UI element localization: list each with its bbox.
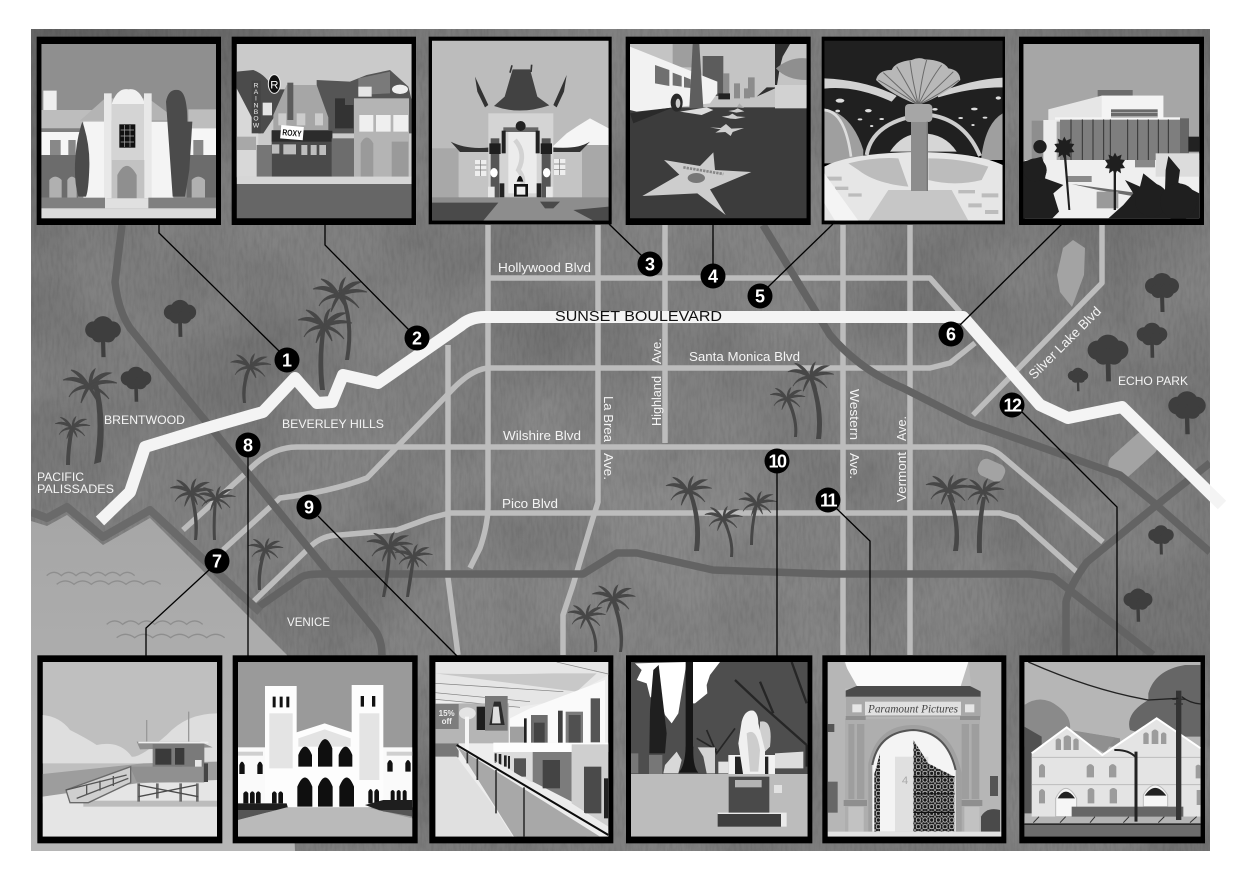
panel 8: Royce Hall [233, 655, 418, 843]
street and area labels: Pico Blvd [502, 496, 558, 511]
panel 11: Paramount gate: 4 [902, 775, 908, 787]
palm trees [55, 278, 1004, 652]
street and area labels: Wilshire Blvd [503, 428, 581, 443]
number markers: 5 [755, 286, 765, 306]
street and area labels: Western [847, 389, 862, 440]
panel 9: shopping mall: 15% [439, 709, 455, 718]
sign: Roxy [280, 125, 304, 140]
coastline [31, 507, 260, 612]
freeways [115, 225, 1210, 655]
water bodies [975, 240, 1162, 484]
street and area labels: Ave. [894, 416, 909, 441]
number markers: 11 [820, 490, 838, 510]
panel 2: Rainbow and Roxy street [232, 37, 416, 225]
street and area labels: Santa Monica Blvd [689, 349, 800, 364]
ocean [31, 515, 295, 851]
leader lines [146, 224, 1117, 656]
sign: Rainbow [252, 117, 261, 134]
street and area labels: PALISSADES [37, 482, 114, 496]
foliage [1023, 137, 1199, 220]
number markers: 3 [645, 254, 655, 274]
street and area labels: PACIFIC [37, 470, 84, 484]
number markers: 2 [412, 328, 422, 348]
panel 11: Paramount gate [822, 655, 1006, 843]
round trees [85, 273, 1206, 622]
street and area labels: Silver Lake Blvd [1026, 304, 1104, 382]
panel 7: lifeguard tower [37, 655, 222, 843]
panel 3: Chinese Theatre [429, 37, 612, 224]
panel 9: shopping mall [429, 655, 613, 843]
minor roads [183, 225, 1103, 655]
number markers: 6 [946, 324, 956, 344]
ocean waves [47, 572, 225, 638]
street and area labels: BRENTWOOD [104, 413, 185, 427]
panel 12: Echo Park house [1019, 655, 1205, 843]
panel 4: Walk of Fame [626, 37, 811, 225]
number markers: 10 [768, 452, 787, 472]
street and area labels: Ave. [847, 453, 862, 479]
panel 2: Rainbow and Roxy street: ROXY [282, 127, 302, 139]
number markers: 9 [304, 498, 314, 518]
street and area labels: Vermont [894, 452, 909, 502]
street and area labels: BEVERLEY HILLS [282, 417, 384, 431]
number markers [204, 252, 1024, 574]
street and area labels: Highland [649, 376, 664, 426]
street and area labels: SUNSET BOULEVARD [555, 309, 722, 325]
road: Sunset Boulevard [100, 317, 1222, 521]
panel 2: Rainbow and Roxy street: R [270, 79, 278, 91]
panel 10: cemetery angel [626, 655, 812, 843]
number markers: 7 [212, 552, 222, 572]
panel 9: shopping mall: off [442, 717, 452, 726]
number markers: 4 [708, 266, 718, 286]
street and area labels: ECHO PARK [1118, 374, 1188, 388]
street and area labels: Ave. [601, 453, 616, 480]
panel 1: mansion [37, 37, 221, 225]
panel 5: Pantages lobby palm [822, 37, 1005, 224]
panel 6: modern building with palms [1019, 37, 1204, 225]
number markers: 8 [243, 436, 253, 456]
street and area labels: VENICE [287, 615, 330, 629]
street and area labels: La Brea [601, 396, 616, 443]
street and area labels: Ave. [649, 338, 664, 364]
street and area labels [37, 260, 1188, 629]
number markers: 12 [1003, 396, 1022, 416]
number markers: 1 [282, 350, 292, 370]
panel 11: Paramount gate: Paramount Pictures [867, 704, 959, 716]
street and area labels: Hollywood Blvd [498, 260, 591, 275]
panel 2: Rainbow and Roxy street: RAINBOW [252, 82, 259, 129]
